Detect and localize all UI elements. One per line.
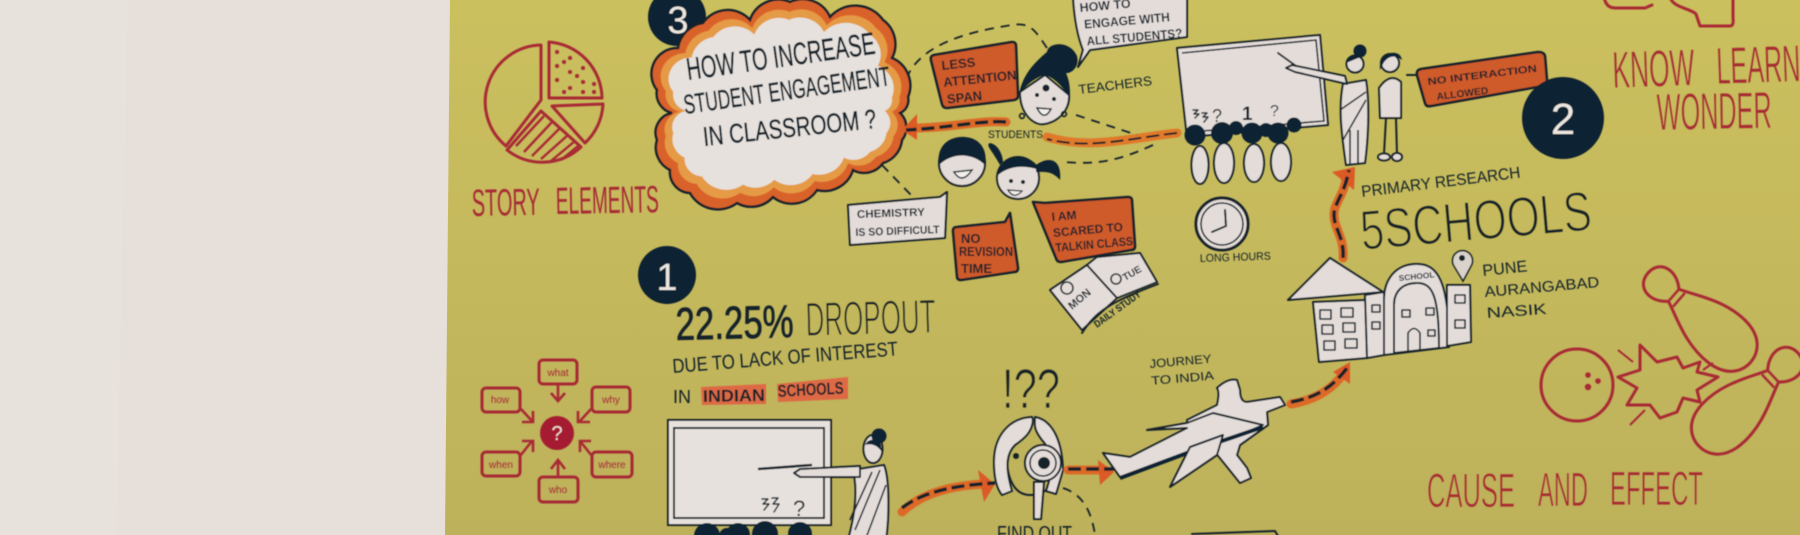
badge 3 xyxy=(648,0,706,46)
teacher pointing xyxy=(758,428,888,535)
callout: chemistry: CHEMISTRY xyxy=(857,207,926,221)
icon: bowling pin lower xyxy=(1679,332,1800,466)
classroom scene 1 xyxy=(668,420,888,535)
icon: school building: SCHOOL xyxy=(1398,270,1435,283)
arrow: classroom to find out xyxy=(902,470,995,512)
heading: story elements xyxy=(471,179,659,225)
text: cities: AURANGABAD xyxy=(1484,274,1600,301)
icon: find out head with magnifier: !?? xyxy=(1002,357,1060,420)
heading: story elements: STORY xyxy=(471,182,540,225)
arrow: find out to plane xyxy=(1068,460,1114,485)
dashed arrows to teacher and girl xyxy=(1064,115,1153,163)
icon: question words diagram xyxy=(482,360,632,502)
classroom scene 2 xyxy=(1177,35,1402,184)
seated students xyxy=(1184,103,1302,184)
students' heads: ? xyxy=(793,496,805,521)
speech bubble: how to engage: ALL STUDENTS? xyxy=(1086,26,1183,49)
icon: daily study book: MON xyxy=(1066,287,1094,312)
box: why xyxy=(592,387,630,412)
heading: 5 schools: 5SCHOOLS xyxy=(1358,179,1594,262)
callout: no revision time xyxy=(953,213,1018,280)
badge 1 xyxy=(638,246,696,304)
badge 2 xyxy=(1522,77,1604,159)
heading: dropout stat xyxy=(675,291,936,350)
label: students: STUDENTS xyxy=(988,129,1043,141)
text: in indian schools xyxy=(673,377,848,407)
box: who xyxy=(539,477,578,502)
panel: cause and effect xyxy=(1427,252,1800,518)
heading: cause and effect: AND xyxy=(1538,464,1588,517)
badge 3: 3 xyxy=(667,0,689,42)
bottom box fragment xyxy=(1192,531,1278,535)
icon: daily study book xyxy=(1050,253,1158,333)
icon: bowling ball xyxy=(1541,349,1613,421)
students' heads xyxy=(694,496,812,535)
cloud text: STUDENT ENGAGEMENT xyxy=(682,61,892,120)
text: cities: NASIK xyxy=(1486,301,1547,322)
icon: daily study book: TUE xyxy=(1121,264,1144,284)
callout: no interaction allowed: ALLOWED xyxy=(1436,86,1489,103)
arrow: up to classroom xyxy=(1332,167,1355,258)
icon: speech bubbles xyxy=(1604,0,1733,26)
box: who: who xyxy=(548,485,568,496)
cloud text xyxy=(682,26,892,152)
wall background xyxy=(0,0,460,535)
icon: clock xyxy=(1196,198,1248,250)
heading: dropout stat: 22.25% xyxy=(675,295,794,350)
box: what: what xyxy=(546,368,569,379)
question circle xyxy=(540,416,574,450)
box: what xyxy=(539,360,577,384)
dashed link to cloud xyxy=(908,24,1047,75)
badge 1: 1 xyxy=(656,257,678,299)
label: journey to India: JOURNEY xyxy=(1149,352,1212,371)
icon: find out head with magnifier xyxy=(994,357,1063,519)
arrow: plane to school xyxy=(1291,362,1350,404)
text: primary research: PRIMARY RESEARCH xyxy=(1360,165,1521,201)
callout: scared to talk: I AM xyxy=(1051,208,1077,224)
callout: less attention span xyxy=(931,42,1019,108)
seated students: 1 xyxy=(1242,104,1253,125)
label: long hours: LONG HOURS xyxy=(1200,251,1271,265)
seated students: ? xyxy=(1270,103,1279,120)
text: in indian schools: INDIAN xyxy=(703,386,765,406)
icon: plane over India xyxy=(1103,352,1285,487)
callout: no revision time: NO xyxy=(961,231,980,246)
callout: less attention span: ATTENTION xyxy=(943,67,1017,90)
poster background xyxy=(445,0,1800,535)
box: how: how xyxy=(491,395,510,406)
callout: no interaction allowed: NO INTERACTION xyxy=(1427,64,1538,88)
text: cities: PUNE xyxy=(1482,258,1528,280)
heading: cause and effect: CAUSE xyxy=(1427,465,1515,518)
icon: impact burst xyxy=(1618,345,1718,425)
student figure xyxy=(1378,53,1402,161)
teacher figure xyxy=(1278,44,1368,165)
poster drawing layer xyxy=(471,0,1800,535)
callout: less attention span: SPAN xyxy=(946,88,983,107)
callout: no interaction allowed xyxy=(1407,52,1547,106)
whiteboard xyxy=(668,420,831,525)
speech bubble: how to engage: ENGAGE WITH xyxy=(1084,10,1170,32)
box: where: where xyxy=(597,460,626,471)
callout: scared to talk: SCARED TO xyxy=(1052,220,1123,240)
boy face xyxy=(939,137,986,186)
text: due to lack of interest: DUE TO LACK OF INTEREST xyxy=(672,338,899,378)
callout: less attention span: LESS xyxy=(941,54,976,73)
question circle: ? xyxy=(551,423,563,445)
heading: cause and effect xyxy=(1427,463,1703,518)
box: why: why xyxy=(601,395,620,406)
callout: scared to talk: TALKIN CLASS xyxy=(1055,234,1134,255)
panel: cause and effect: EFFECT xyxy=(1610,463,1703,516)
badge 2: 2 xyxy=(1551,95,1575,144)
box: when xyxy=(482,452,520,476)
box: when: when xyxy=(488,460,513,471)
arrow: classroom to students xyxy=(1047,133,1177,144)
heading: dropout stat: DROPOUT xyxy=(805,291,936,347)
cloud text: HOW TO INCREASE xyxy=(684,26,877,87)
cloud: main question xyxy=(651,0,910,209)
callout: no revision time: TIME xyxy=(961,261,992,276)
speech bubble: how to engage xyxy=(1073,0,1187,67)
callout: scared to talk xyxy=(1033,197,1135,262)
text: in indian schools: SCHOOLS xyxy=(777,379,844,401)
label: journey to India: TO INDIA xyxy=(1151,368,1215,388)
callout: chemistry: IS SO DIFFICULT xyxy=(855,224,940,239)
girl face xyxy=(988,143,1060,199)
panel: know learn wonder xyxy=(1604,0,1800,142)
label: teachers: TEACHERS xyxy=(1078,73,1153,97)
seated students: ? xyxy=(1212,106,1222,126)
icon: school building xyxy=(1288,258,1471,362)
text: in indian schools: IN xyxy=(673,387,691,407)
panel: story elements xyxy=(471,42,659,225)
teacher face xyxy=(1019,44,1078,124)
arrows into question xyxy=(520,385,592,477)
arrow: students to question xyxy=(902,114,1006,140)
box: where xyxy=(592,452,632,477)
heading: story elements: ELEMENTS xyxy=(555,179,659,223)
dashed link: chemistry xyxy=(882,165,913,197)
callout: chemistry xyxy=(848,192,947,245)
icon: pie chart xyxy=(485,42,603,162)
wall seam panel xyxy=(116,0,460,535)
callout: no revision time: REVISION xyxy=(959,244,1013,259)
icon: location pin xyxy=(1452,251,1472,281)
icon: bowling pin upper xyxy=(1630,252,1769,383)
text: cities xyxy=(1482,258,1600,322)
heading: know learn: KNOW xyxy=(1611,39,1695,100)
icon: daily study book: DAILY STUDY xyxy=(1092,289,1143,330)
whiteboard xyxy=(1177,35,1328,137)
cloud text: IN CLASSROOM ? xyxy=(701,104,878,152)
box: how xyxy=(482,388,520,412)
dashed link from find out xyxy=(1063,488,1095,535)
